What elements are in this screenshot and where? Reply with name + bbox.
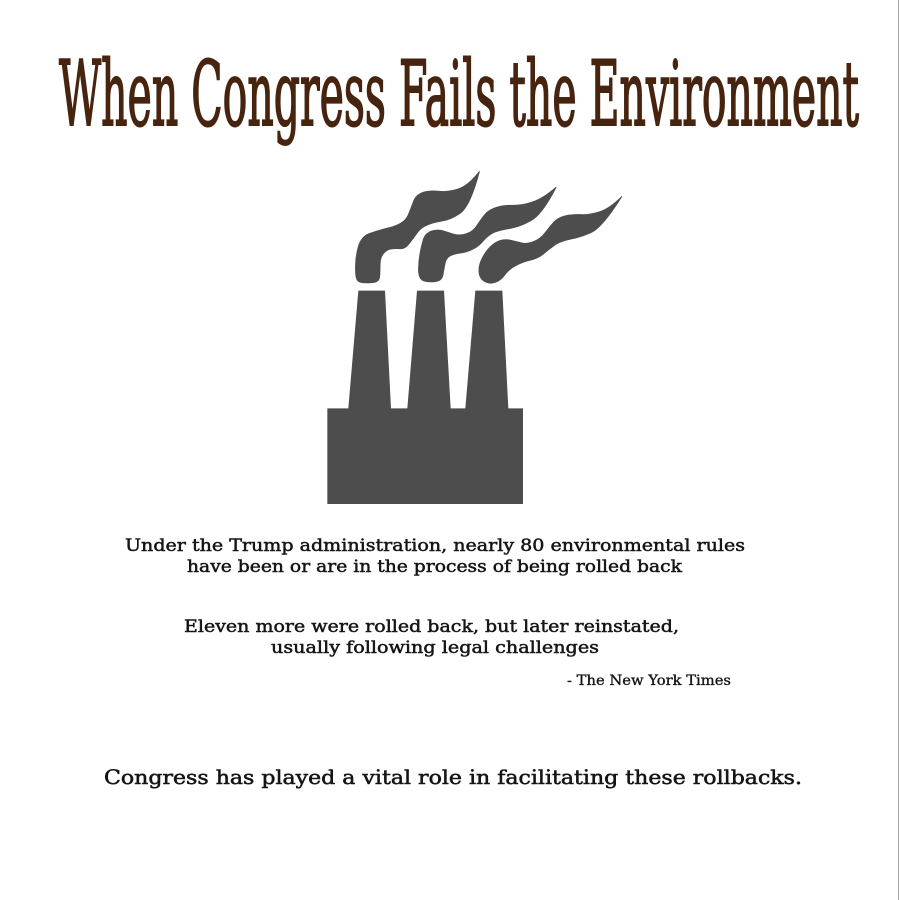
text block: rollback count — [125, 536, 745, 577]
smoke plume 2 — [419, 187, 556, 282]
smoke plume 1 — [356, 172, 479, 283]
text block: reinstated rules: Eleven more were rolled back, but later reinstated, — [184, 617, 679, 637]
source attribution: - The New York Times — [567, 673, 731, 689]
closing statement: Congress has played a vital role in facilitating these rollbacks. — [104, 765, 802, 789]
text block: reinstated rules: usually following legal challenges — [271, 638, 599, 658]
factory building — [327, 291, 523, 504]
text block: rollback count: have been or are in the process of being rolled back — [187, 557, 683, 577]
icon: factory with three smoking chimneys — [327, 172, 622, 504]
text block: rollback count: Under the Trump administration, nearly 80 environmental rules — [125, 536, 745, 556]
text block: reinstated rules — [184, 617, 679, 658]
smoke plume 3 — [479, 197, 622, 283]
